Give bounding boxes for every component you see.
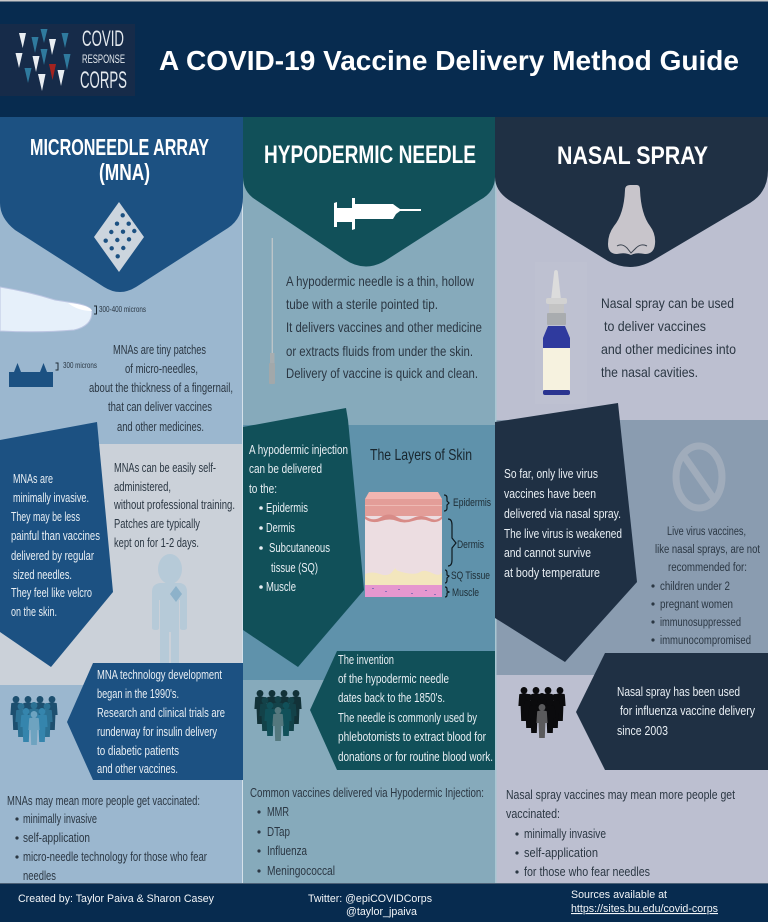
text: self-administered: administered,: [114, 480, 171, 494]
callout: history of the needle: [310, 651, 495, 770]
callout: development timeline: Research and clinical trials are: [97, 706, 225, 720]
icon: prohibition sign: [676, 446, 722, 508]
text: common vaccines list: DTap: [267, 825, 290, 839]
text: self-administered: Patches are typically: [114, 517, 201, 531]
callout: injection sites: Dermis: [266, 521, 295, 535]
logo: Covid Response Corps: CORPS: [80, 67, 127, 94]
title: A COVID-19 Vaccine Delivery Method Guide: [159, 45, 739, 76]
text: what MNAs are: of micro-needles,: [125, 362, 198, 376]
text: what MNAs are: [89, 343, 233, 434]
callout: minimally invasive: [0, 422, 113, 667]
text: nasal spray benefits list: self-application: [524, 846, 598, 860]
text: MNA benefits list: needles: [23, 869, 56, 883]
credits: Created by: Taylor Paiva & Sharon Casey: [18, 893, 214, 905]
twitter handles: Twitter: @epiCOVIDCorps: [308, 893, 432, 905]
callout: minimally invasive: sized needles.: [13, 568, 72, 582]
callout: minimally invasive: MNAs are: [13, 472, 53, 486]
callout: live virus: delivered via nasal spray.: [504, 507, 621, 521]
text: common vaccines list: MMR: [267, 805, 289, 819]
text: not recommended for: immunocompromised: [660, 635, 751, 647]
text: self-administered: without professional training.: [113, 498, 235, 512]
callout: development timeline: runderway for insulin delivery: [97, 725, 218, 739]
callout: injection sites: Muscle: [266, 580, 296, 594]
text: not recommended for: recommended for:: [668, 562, 747, 574]
text: what MNAs are: and other medicines.: [117, 420, 204, 434]
heading: microneedle array: [0, 117, 243, 292]
panel: microneedle array column: [0, 117, 244, 884]
callout: live virus: [495, 403, 637, 662]
callout: minimally invasive: painful than vaccines: [11, 529, 100, 543]
text: self-administered: kept on for 1-2 days.: [114, 536, 199, 550]
text: common vaccines list: Meningococcal: [267, 864, 335, 878]
callout: history of the needle: donations or for routine blood work.: [338, 750, 493, 764]
icon: person with patch: [152, 554, 187, 664]
callout: history of the needle: The invention: [338, 653, 394, 667]
callout: minimally invasive: They may be less: [11, 510, 80, 524]
text: MNA benefits list: minimally invasive: [23, 812, 97, 826]
logo: Covid Response Corps: [0, 24, 135, 96]
icon: microneedle patch: [94, 202, 144, 272]
callout: development timeline: began in the 1990's.: [97, 687, 179, 701]
text: not recommended for: immunosuppressed: [660, 617, 741, 629]
heading: microneedle array: (MNA): [99, 159, 150, 185]
callout: history of the needle: dates back to the 1850's.: [338, 691, 445, 705]
callout: injection sites: A hypodermic injection: [249, 443, 348, 457]
braces and layer labels: SQ Tissue: [451, 570, 490, 582]
text: MNA benefits list: self-application: [23, 831, 90, 845]
icon: crowd, teal: [254, 690, 302, 741]
logo: Covid Response Corps: RESPONSE: [82, 52, 125, 66]
callout: history of the needle: of the hypodermic needle: [338, 672, 449, 686]
panel: hypodermic needle column: [243, 117, 495, 884]
callout: live virus: vaccines have been: [504, 487, 596, 501]
callout: minimally invasive: delivered by regular: [11, 549, 94, 563]
text: self-administered: MNAs can be easily self-: [114, 461, 216, 475]
chart: layers of skin: [365, 447, 491, 599]
text: common vaccines list: [250, 786, 484, 878]
text: common vaccines list: Influenza: [267, 844, 307, 858]
text: MNA benefits list: [7, 794, 207, 883]
callout: minimally invasive: minimally invasive.: [13, 491, 89, 505]
icon: microneedle scale diagram: [9, 361, 97, 387]
braces and layer labels: Muscle: [452, 587, 479, 599]
text: what a hypodermic needle is: tube with a sterile pointed tip.: [286, 296, 438, 312]
callout: injection sites: can be delivered: [249, 462, 322, 476]
braces and layer labels: Epidermis: [453, 497, 491, 509]
braces and layer labels: [444, 495, 491, 599]
text: MNA benefits list: micro-needle technology for those who fear: [23, 850, 207, 864]
icon: crowd, blue: [10, 696, 58, 745]
callout: development timeline: to diabetic patients: [97, 744, 179, 758]
callout: minimally invasive: They feel like velcro: [11, 586, 92, 600]
text: MNA benefits list: MNAs may mean more people get vaccinated:: [7, 794, 200, 808]
callout: history of the needle: phlebotomists to extract blood for: [338, 730, 486, 744]
icon: microneedle scale diagram: 300 microns: [63, 361, 97, 370]
heading: hypodermic needle: HYPODERMIC NEEDLE: [264, 141, 476, 169]
callout: injection sites: to the:: [249, 482, 277, 496]
text: what MNAs are: about the thickness of a fingernail,: [89, 381, 233, 395]
text: not recommended for: [651, 526, 761, 647]
icon: crowd, black: [518, 687, 566, 738]
icon: nose: [608, 185, 655, 255]
text: nasal spray benefits list: minimally invasive: [524, 827, 606, 841]
text: not recommended for: children under 2: [660, 581, 730, 593]
heading: hypodermic needle: [243, 117, 495, 266]
callout: influenza delivery: since 2003: [617, 724, 668, 738]
header band: [0, 0, 768, 118]
text: self-administered: [113, 461, 235, 550]
callout: influenza delivery: Nasal spray has been used: [617, 685, 740, 699]
icon: syringe: [334, 198, 421, 230]
callout: live virus: and cannot survive: [504, 546, 591, 560]
text: nasal spray benefits list: vaccinated:: [506, 807, 560, 821]
panel: nasal spray column: [495, 117, 768, 884]
text: nasal spray benefits list: for those who fear needles: [524, 865, 650, 879]
footer: [0, 883, 768, 922]
twitter handles: @taylor_jpaiva: [346, 906, 418, 918]
callout: injection sites: Subcutaneous: [269, 541, 330, 555]
text: what a hypodermic needle is: Delivery of vaccine is quick and clean.: [286, 365, 478, 381]
text: what MNAs are: MNAs are tiny patches: [113, 343, 206, 357]
icon: nasal spray bottle: [535, 262, 587, 404]
callout: minimally invasive: on the skin.: [11, 605, 57, 619]
text: what nasal spray is: and other medicines into: [601, 341, 736, 357]
text: what a hypodermic needle is: A hypodermic needle is a thin, hollow: [286, 273, 475, 289]
heading: layers of skin: The Layers of Skin: [370, 447, 472, 464]
text: nasal spray benefits list: [506, 788, 735, 879]
icon: fingertip with scale: 300-400 microns: [99, 305, 146, 314]
callout: injection sites: [243, 408, 364, 667]
text: what a hypodermic needle is: or extracts fluids from under the skin.: [286, 343, 473, 359]
text: what MNAs are: that can deliver vaccines: [108, 400, 212, 414]
callout: injection sites: tissue (SQ): [271, 561, 318, 575]
sources: https://sites.bu.edu/covid-corps: [571, 903, 718, 915]
text: what nasal spray is: the nasal cavities.: [601, 364, 698, 380]
callout: development timeline: [67, 663, 243, 780]
text: what nasal spray is: to deliver vaccines: [604, 318, 706, 334]
callout: live virus: at body temperature: [504, 566, 600, 580]
heading: nasal spray: NASAL SPRAY: [557, 142, 708, 170]
braces and layer labels: Dermis: [457, 539, 484, 551]
text: what nasal spray is: [601, 295, 736, 380]
logo: Covid Response Corps: COVID: [82, 26, 124, 51]
text: what a hypodermic needle is: It delivers vaccines and other medicine: [286, 319, 482, 335]
sources: Sources available at: [571, 889, 667, 901]
sources: [571, 889, 718, 915]
text: not recommended for: Live virus vaccines,: [667, 526, 746, 538]
text: not recommended for: pregnant women: [660, 599, 733, 611]
callout: development timeline: MNA technology development: [97, 668, 222, 682]
heading: microneedle array: MICRONEEDLE ARRAY: [30, 134, 209, 160]
text: common vaccines list: Common vaccines delivered via Hypodermic Injection:: [250, 786, 484, 800]
text: what nasal spray is: Nasal spray can be used: [601, 295, 734, 311]
icon: fingertip with scale: [0, 287, 146, 332]
callout: development timeline: and other vaccines.: [97, 762, 178, 776]
skin cross-section: [365, 492, 442, 597]
callout: history of the needle: The needle is commonly used by: [338, 711, 478, 725]
callout: injection sites: Epidermis: [266, 501, 308, 515]
callout: live virus: The live virus is weakened: [504, 527, 622, 541]
heading: nasal spray: [495, 117, 768, 267]
callout: influenza delivery: [576, 653, 768, 770]
twitter handles: [308, 893, 432, 918]
callout: live virus: So far, only live virus: [504, 467, 598, 481]
icon: needle: [269, 238, 275, 384]
text: what a hypodermic needle is: [286, 273, 482, 381]
